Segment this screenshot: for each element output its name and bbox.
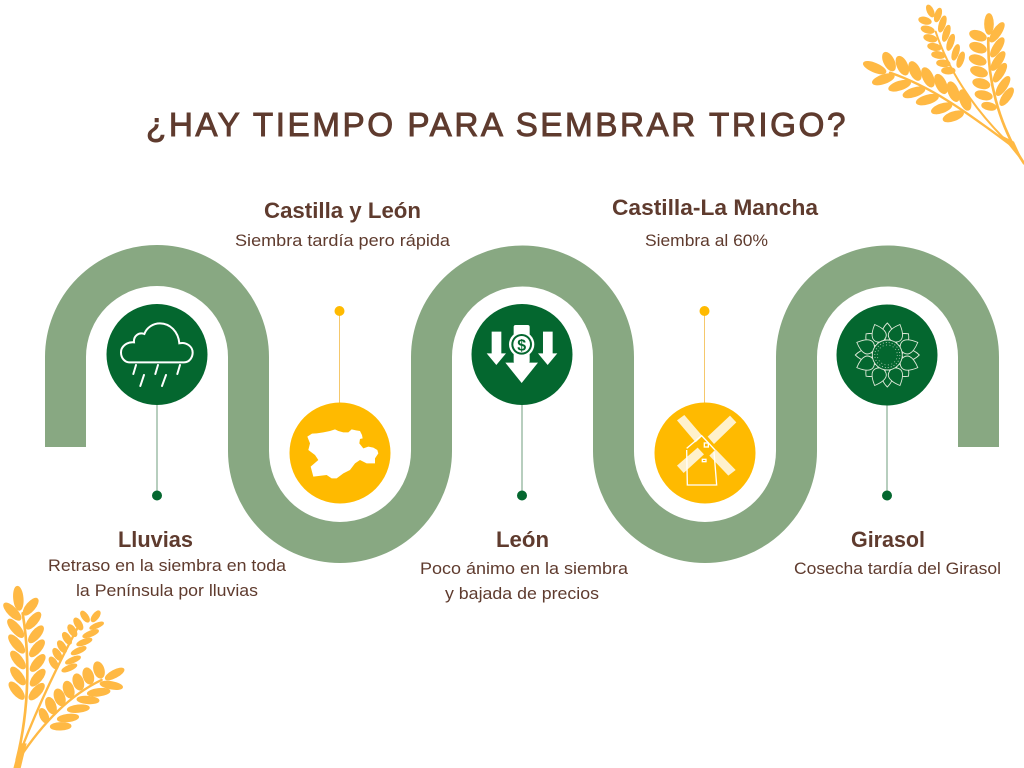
label: León: León [496,527,549,552]
label: Girasol: Cosecha tardía del Girasol [794,559,1001,578]
connector: Lluvias [152,400,162,500]
wheat decoration: top right [862,4,1024,165]
label: Lluvias [48,527,287,600]
connector: Castilla y León [334,306,344,405]
serpentine path [66,266,978,542]
connector: León [517,400,527,500]
label: Girasol: Girasol [851,527,925,552]
label: Castilla-La Mancha: Siembra al 60% [645,231,768,250]
label: Castilla-La Mancha: Castilla-La Mancha [612,195,819,220]
wheat decoration: bottom left [2,586,125,768]
label: Castilla y León: Castilla y León [264,198,421,223]
label: Castilla y León [235,198,451,250]
icon: sunflower [836,304,938,406]
icon: falling prices: $ [517,337,526,354]
label: Girasol [794,527,1001,578]
label: León: Poco ánimo en la siembra [420,559,629,578]
label: Lluvias: Retraso en la siembra en toda [48,556,287,575]
icon: falling prices [472,304,572,405]
title: ¿HAY TIEMPO PARA SEMBRAR TRIGO? [146,106,848,143]
label: Castilla y León: Siembra tardía pero rápida [235,231,451,250]
label: León [420,527,629,603]
icon: windmill [654,402,756,504]
label: León: y bajada de precios [445,584,599,603]
connector: Castilla-La Mancha [700,306,710,405]
label: Castilla-La Mancha [612,195,819,250]
icon: map of Castilla y León [290,402,390,504]
icon: rain cloud [106,304,208,405]
label: Lluvias: Lluvias [118,527,193,552]
connector: Girasol [882,400,892,500]
label: Lluvias: la Península por lluvias [76,581,258,600]
